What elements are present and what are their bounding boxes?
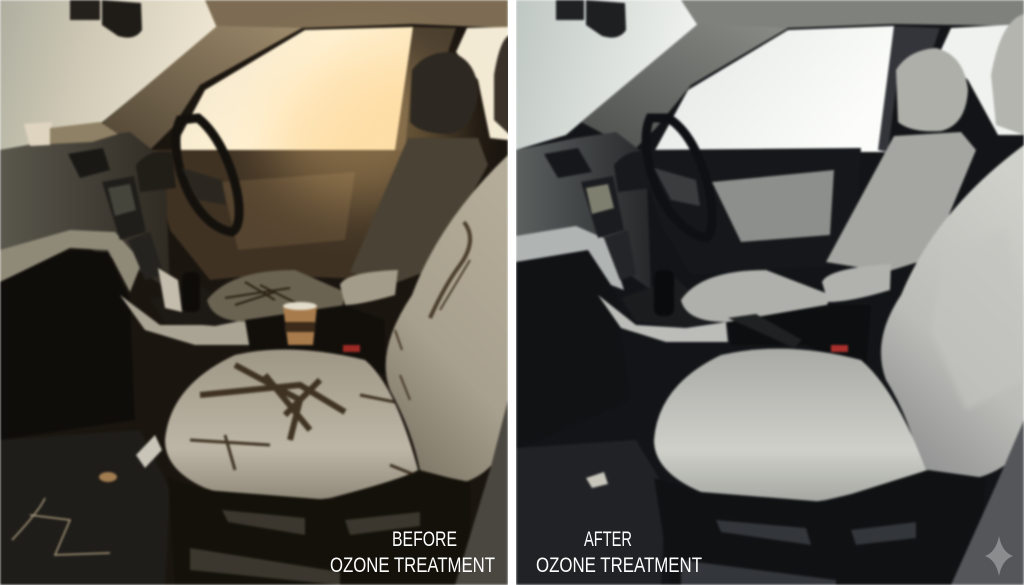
instrument binnacle: [136, 151, 176, 192]
seat back stains: [395, 222, 470, 400]
console dark: [244, 304, 344, 347]
far seat back: [350, 138, 488, 285]
red tag: [343, 345, 360, 352]
gear console: [120, 268, 250, 345]
passenger headrest: [896, 48, 968, 131]
rear headrest: [494, 35, 510, 135]
seat adjust levers: [681, 520, 916, 585]
door edge: [951, 420, 1024, 585]
red tag: [831, 345, 848, 352]
sparkle watermark: [985, 536, 1013, 576]
lower dash footwell: [516, 252, 631, 450]
caption: after: AFTER: [584, 528, 632, 551]
windshield: [0, 0, 217, 150]
caption: before: OZONE TREATMENT: [330, 554, 495, 577]
side window: [172, 27, 413, 152]
center console vents and screen: [68, 148, 164, 280]
seat back stitch panel: [931, 228, 1024, 410]
floor mat: [0, 430, 170, 585]
silver dash trim: [516, 226, 624, 290]
steering wheel: [646, 118, 712, 238]
a pillar: [581, 24, 788, 150]
seat adjust levers: [190, 510, 420, 585]
far cushion stains: [225, 282, 300, 305]
a pillar: [100, 26, 302, 150]
windshield: [516, 0, 698, 150]
panel: before ozone treatment: [0, 0, 510, 585]
door silver inset: [712, 170, 834, 242]
cushion hair stains: [190, 365, 415, 475]
before photo scene: [0, 0, 510, 585]
floor litter: [12, 435, 162, 555]
door inset: [222, 172, 355, 250]
floor litter: [586, 472, 608, 488]
gear console: [598, 270, 728, 342]
side window: [654, 26, 894, 152]
instrument binnacle: [614, 151, 652, 192]
b pillar: [395, 27, 456, 152]
cup on dash: [24, 122, 118, 146]
b pillar: [878, 26, 940, 152]
sun glare: [265, 55, 455, 205]
caption: after: [536, 528, 702, 577]
rear window: [940, 24, 1024, 135]
panel: after ozone treatment: [516, 0, 1024, 585]
arm rest: [822, 264, 891, 302]
rear window: [456, 27, 508, 140]
caption: before: BEFORE: [392, 528, 457, 551]
door edge: [455, 400, 508, 585]
steering wheel: [176, 118, 239, 232]
seat base: [212, 474, 468, 504]
main seat back: [386, 155, 508, 482]
handbrake: [728, 314, 802, 348]
door panel: [636, 148, 861, 275]
far seat cushion: [207, 270, 345, 322]
rear view mirror: [556, 0, 626, 38]
caption: after: OZONE TREATMENT: [536, 554, 702, 577]
roof: [681, 0, 1024, 28]
main seat back: [881, 145, 1024, 482]
seat cushion: [165, 350, 418, 501]
dashboard: [516, 132, 651, 290]
far seat cushion: [681, 270, 831, 322]
far seat back: [826, 132, 976, 272]
caption: before: [330, 532, 495, 572]
lower dash footwell: [0, 250, 135, 440]
seat cushion: [654, 349, 926, 504]
rear view mirror: [70, 0, 142, 38]
arm rest: [340, 270, 398, 305]
console dark: [728, 305, 871, 372]
passenger headrest: [410, 52, 478, 134]
center console vents and screen: [544, 148, 636, 280]
roof: [205, 0, 508, 28]
dashboard: [0, 132, 170, 290]
seat base: [654, 470, 986, 585]
rear headrest: [991, 14, 1024, 135]
door panel: [150, 150, 410, 280]
silver dash trim: [0, 230, 142, 292]
after photo scene: [516, 0, 1024, 585]
coffee cup: [283, 302, 317, 345]
floor mat: [516, 440, 666, 585]
